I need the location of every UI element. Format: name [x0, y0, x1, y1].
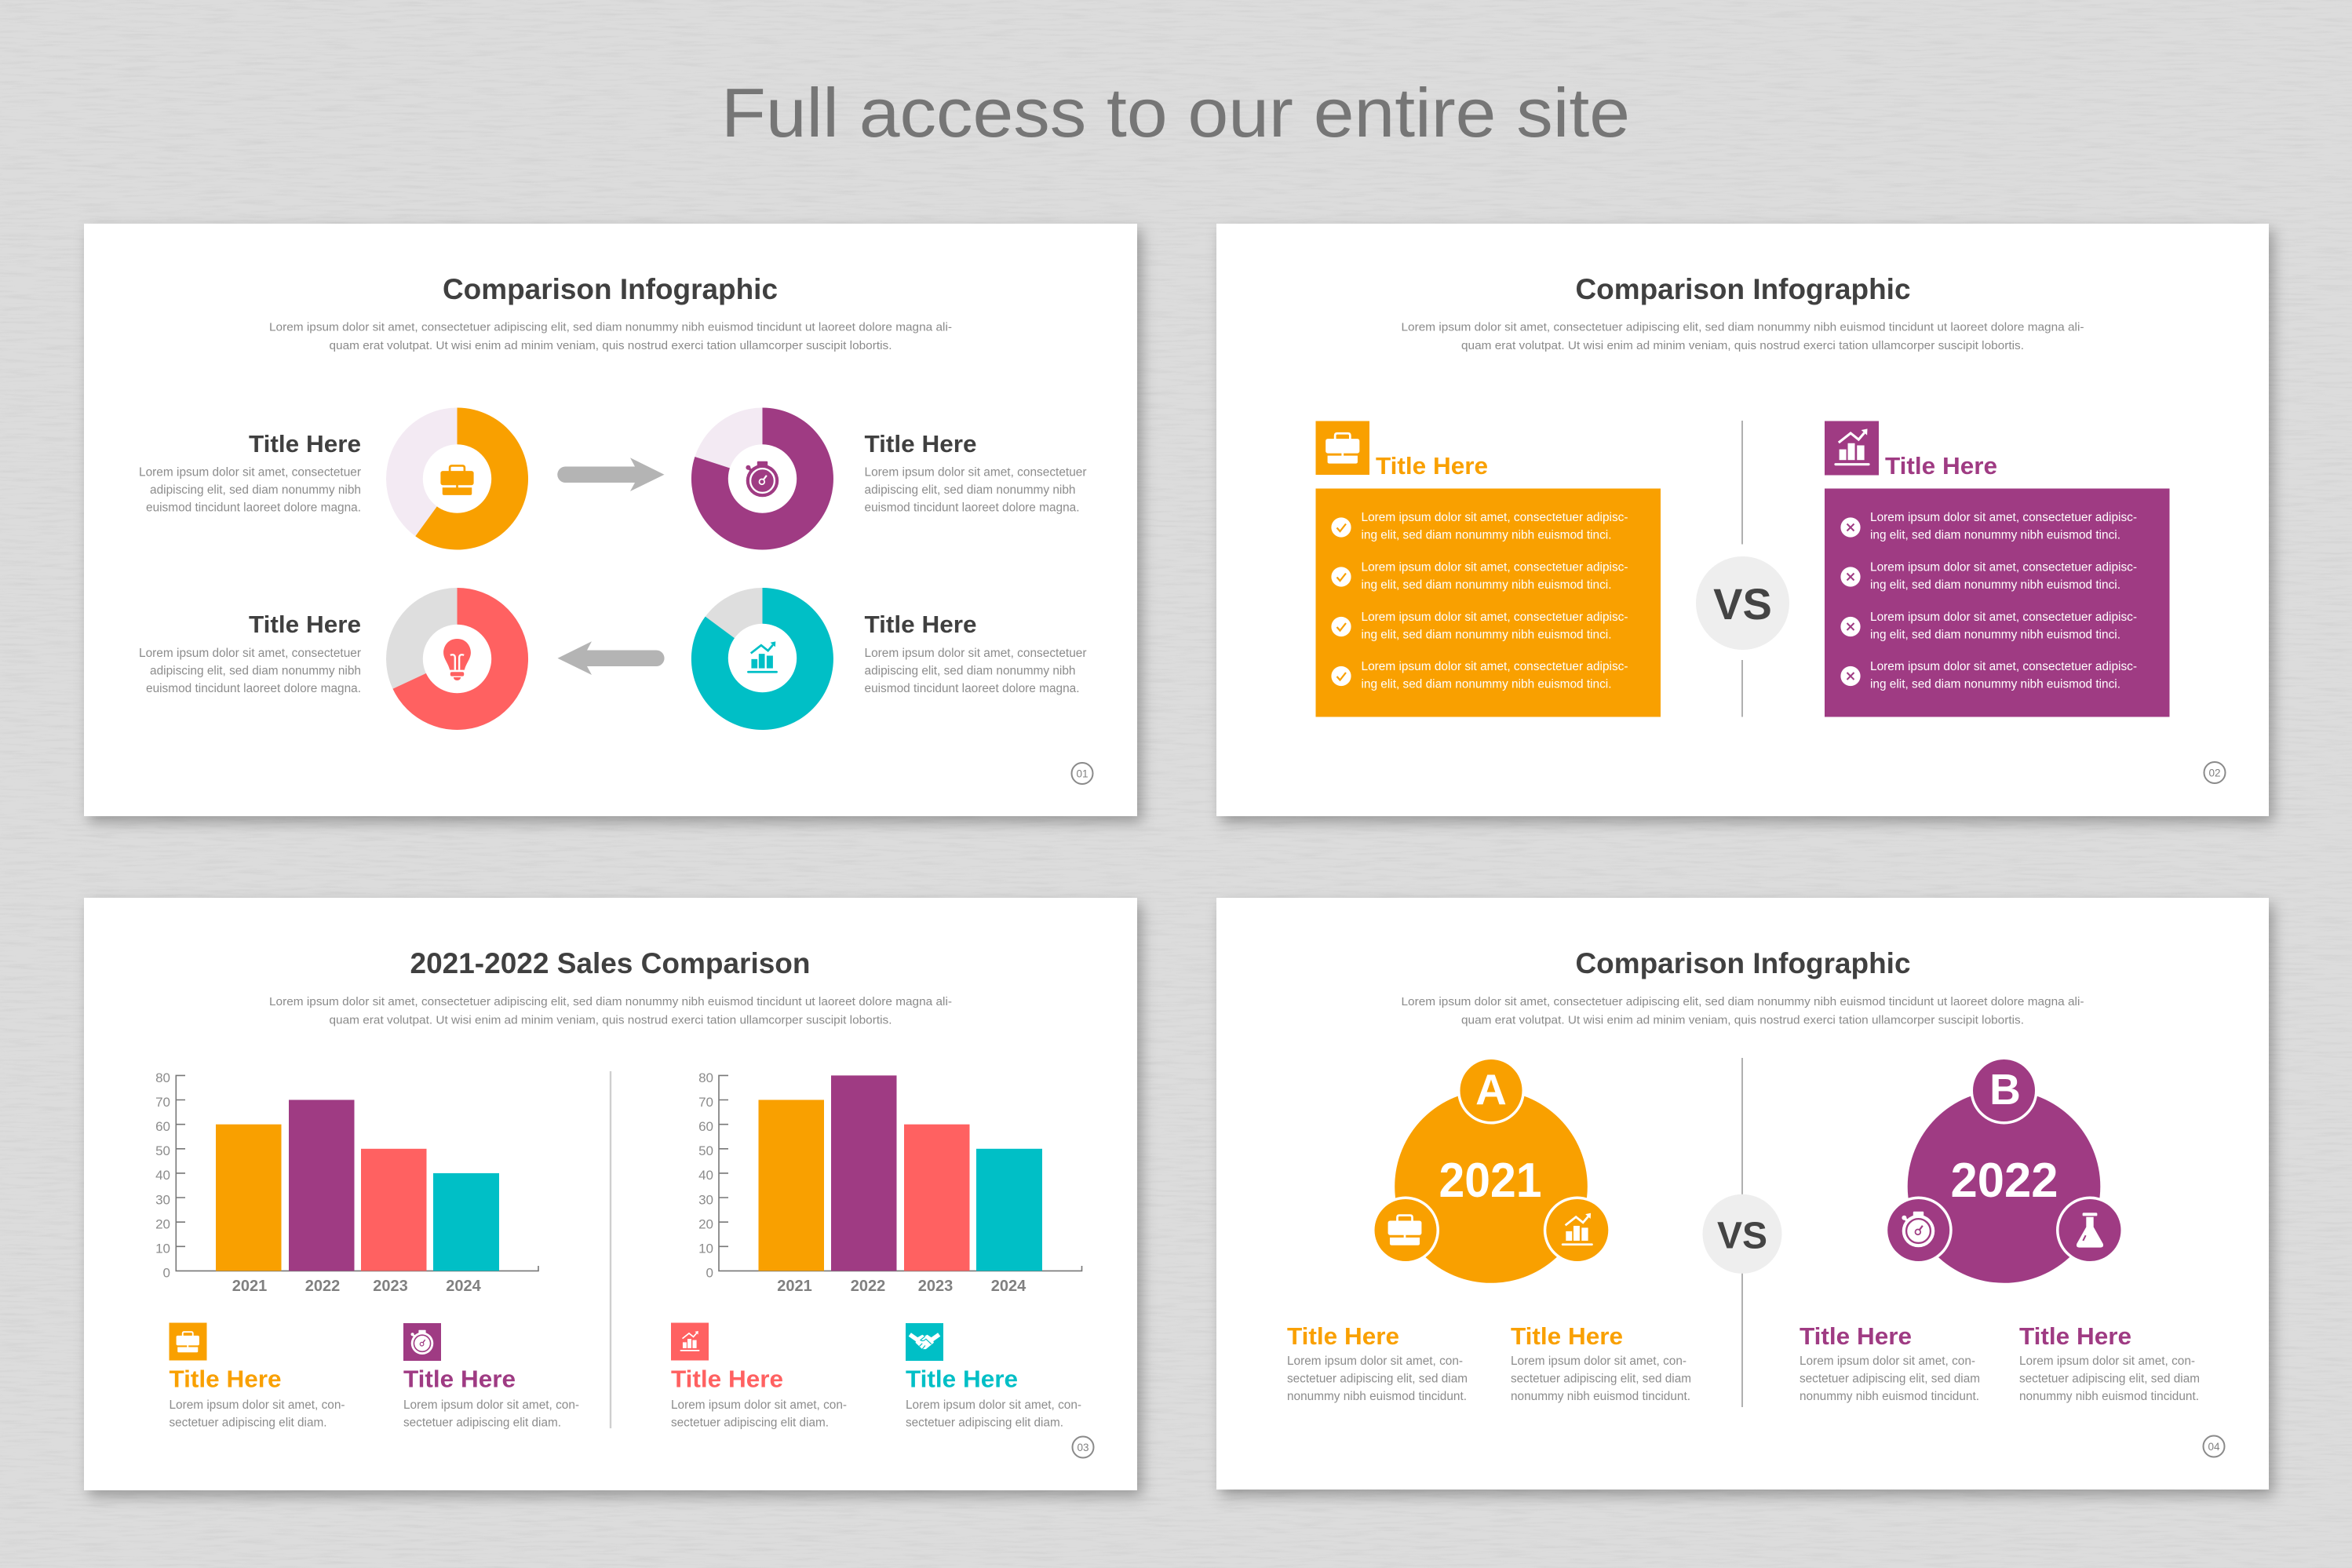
arrow: right [557, 458, 664, 491]
bar chart: left: 50 [155, 1143, 170, 1158]
panel 2 card [1216, 224, 2269, 816]
text block: orange one: Lorem ipsum dolor sit amet, con- [1287, 1355, 1463, 1368]
panel 1 intro text: Lorem ipsum dolor sit amet, consectetuer adipiscing elit, sed diam nonummy nibh euismod tincidunt ut laoreet dolore magna ali- [269, 320, 952, 334]
text block: purple one: nonummy nibh euismod tincidunt. [1800, 1390, 1979, 1403]
text block: top right: Lorem ipsum dolor sit amet, consectetuer [865, 466, 1086, 479]
list item 4: ing elit, sed diam nonummy nibh euismod tinci. [1870, 678, 2120, 691]
center divider and VS badge [1696, 421, 1789, 717]
bar chart: right: 60 [698, 1119, 713, 1134]
legend item: purple: Title Here [403, 1366, 516, 1392]
text block: bottom left: Title Here [249, 611, 361, 638]
panel 3 intro text [269, 995, 952, 1026]
donut: teal 85 percent [691, 588, 833, 730]
bar chart: right: 10 [698, 1242, 713, 1256]
panel 3 intro text: Lorem ipsum dolor sit amet, consectetuer adipiscing elit, sed diam nonummy nibh euismod tincidunt ut laoreet dolore magna ali- [269, 995, 952, 1008]
bar chart: right: 30 [698, 1193, 713, 1207]
right column header with icon: Title Here [1885, 452, 1997, 480]
panel 3 intro text: quam erat volutpat. Ut wisi enim ad minim veniam, quis nostrud exerci tation ullamcorper suscipit lobortis. [330, 1014, 892, 1026]
bar chart: left: 10 [155, 1242, 170, 1256]
purple 2022 circle cluster: 2022 [1951, 1154, 2058, 1208]
donut: purple 80 percent [691, 408, 833, 549]
panel 4 intro text: Lorem ipsum dolor sit amet, consectetuer adipiscing elit, sed diam nonummy nibh euismod tincidunt ut laoreet dolore magna ali- [1402, 995, 2084, 1008]
bar chart: left: 2022 [305, 1278, 340, 1295]
panel 2 intro text [1402, 320, 2084, 352]
panel 4 card [1216, 898, 2269, 1490]
bar chart: left: 60 [155, 1119, 170, 1134]
bar chart: left: 80 [155, 1070, 170, 1085]
badge growth chart [1544, 1196, 1611, 1264]
page number 02: 02 [2208, 768, 2221, 779]
panel 1 intro text [269, 320, 952, 352]
bar chart: left [155, 1070, 538, 1295]
text block: bottom left: Lorem ipsum dolor sit amet, consectetuer [139, 647, 361, 660]
text block: top right: adipiscing elit, sed diam nonummy nibh [865, 483, 1075, 497]
legend item: coral: Lorem ipsum dolor sit amet, con- [671, 1398, 847, 1412]
text block: orange two: sectetuer adipiscing elit, sed diam [1511, 1372, 1691, 1386]
bar chart: right [698, 1070, 1081, 1295]
bar chart: right: 0 [706, 1265, 713, 1281]
text block: bottom right: euismod tincidunt laoreet dolore magna. [865, 682, 1080, 695]
page number 03 [1072, 1436, 1094, 1458]
text block: purple two: Lorem ipsum dolor sit amet, con- [2019, 1355, 2195, 1368]
badge flask [2056, 1196, 2124, 1264]
page number 04: 04 [2208, 1441, 2220, 1453]
list item 4: Lorem ipsum dolor sit amet, consectetuer adipisc- [1870, 660, 2137, 673]
panel 1 card [84, 224, 1137, 816]
text block: bottom right: adipiscing elit, sed diam nonummy nibh [865, 664, 1075, 678]
bar chart: right: 2021 [777, 1278, 812, 1295]
bar chart: right: 80 [698, 1070, 713, 1085]
text block: orange one: Title Here [1287, 1322, 1399, 1350]
list item 1: Lorem ipsum dolor sit amet, consectetuer adipisc- [1361, 511, 1628, 524]
list item 3 [1840, 611, 2137, 642]
main title: Full access to our entire site [721, 74, 1630, 151]
panel 2: versus lists [1216, 224, 2269, 816]
bar chart: left: 70 [155, 1095, 170, 1110]
bar chart: left: 0 [163, 1265, 170, 1281]
page number 01: 01 [1076, 768, 1088, 780]
text block: bottom left [139, 611, 361, 695]
badge B: B [1989, 1065, 2021, 1114]
bar chart: right: 2024 [991, 1278, 1026, 1295]
bar chart: left: 20 [155, 1216, 170, 1232]
bar chart: left: 2024 [446, 1278, 482, 1295]
legend item: coral [671, 1323, 847, 1430]
legend item: teal [906, 1323, 1081, 1430]
text block: top left: Lorem ipsum dolor sit amet, consectetuer [139, 466, 361, 479]
bar chart: right: 2022 [851, 1278, 885, 1295]
legend item: coral: Title Here [671, 1366, 783, 1392]
orange 2021 circle cluster: 2021 [1439, 1154, 1541, 1208]
text block: top right: Title Here [865, 430, 976, 458]
panel 3: sales bar charts [84, 898, 1137, 1490]
text block: top right [865, 430, 1086, 515]
list item 1 [1331, 511, 1628, 542]
list item 2: ing elit, sed diam nonummy nibh euismod tinci. [1361, 578, 1612, 592]
text block: bottom left: euismod tincidunt laoreet dolore magna. [146, 682, 361, 695]
text block: top left: Title Here [249, 430, 361, 458]
text block: purple two [2019, 1322, 2200, 1403]
list item 3: Lorem ipsum dolor sit amet, consectetuer adipisc- [1870, 611, 2137, 624]
text block: purple two: nonummy nibh euismod tincidunt. [2019, 1390, 2199, 1403]
panel 4 intro text: quam erat volutpat. Ut wisi enim ad minim veniam, quis nostrud exerci tation ullamcorper suscipit lobortis. [1461, 1014, 2024, 1026]
list item 1: Lorem ipsum dolor sit amet, consectetuer adipisc- [1870, 511, 2137, 524]
bar chart: left: 30 [155, 1193, 170, 1207]
legend item: purple: Lorem ipsum dolor sit amet, con- [403, 1398, 579, 1412]
panel 2 heading: Comparison Infographic [1576, 273, 1910, 305]
list item 4 [1331, 660, 1628, 691]
arrow: left [557, 641, 665, 675]
panel 1 intro text: quam erat volutpat. Ut wisi enim ad minim veniam, quis nostrud exerci tation ullamcorper suscipit lobortis. [330, 339, 892, 352]
list item 2 [1331, 560, 1628, 592]
bar chart: right: 40 [698, 1168, 713, 1183]
page number 02 [2204, 762, 2226, 783]
page number 01 [1072, 763, 1092, 784]
list item 3: ing elit, sed diam nonummy nibh euismod tinci. [1361, 628, 1612, 642]
panel 4 heading: Comparison Infographic [1576, 947, 1910, 979]
panel 2 intro text: Lorem ipsum dolor sit amet, consectetuer adipiscing elit, sed diam nonummy nibh euismod tincidunt ut laoreet dolore magna ali- [1402, 320, 2084, 334]
center divider and VS badge: VS [1713, 579, 1772, 629]
bar chart: left: 2023 [373, 1278, 408, 1295]
text block: purple one: Lorem ipsum dolor sit amet, con- [1800, 1355, 1975, 1368]
text block: purple two: Title Here [2019, 1322, 2131, 1350]
divider and VS badge [1703, 1058, 1781, 1407]
legend item: teal: sectetuer adipiscing elit diam. [906, 1416, 1063, 1430]
text block: top left [139, 430, 361, 515]
page number 03: 03 [1077, 1442, 1089, 1453]
right purple list box [1825, 488, 2169, 717]
text block: orange two: nonummy nibh euismod tincidunt. [1511, 1390, 1690, 1403]
legend item: orange [170, 1323, 345, 1430]
bar chart: right: 50 [698, 1143, 713, 1158]
badge B [1970, 1056, 2037, 1124]
bar chart: right: 2023 [918, 1278, 953, 1295]
text block: bottom left: adipiscing elit, sed diam nonummy nibh [150, 664, 361, 678]
legend item: orange: Lorem ipsum dolor sit amet, con- [170, 1398, 345, 1412]
text block: orange one: sectetuer adipiscing elit, sed diam [1287, 1372, 1468, 1386]
list item 3: Lorem ipsum dolor sit amet, consectetuer adipisc- [1361, 611, 1628, 624]
list item 2: Lorem ipsum dolor sit amet, consectetuer adipisc- [1361, 560, 1628, 574]
list item 2: ing elit, sed diam nonummy nibh euismod tinci. [1870, 578, 2120, 592]
divider and VS badge: VS [1717, 1215, 1767, 1257]
text block: orange two: Lorem ipsum dolor sit amet, con- [1511, 1355, 1687, 1368]
panel 2 intro text: quam erat volutpat. Ut wisi enim ad minim veniam, quis nostrud exerci tation ullamcorper suscipit lobortis. [1461, 339, 2024, 352]
list item 1: ing elit, sed diam nonummy nibh euismod tinci. [1870, 529, 2120, 542]
purple 2022 circle cluster [1885, 1056, 2124, 1283]
text block: bottom right: Title Here [865, 611, 976, 638]
page number 04 [2204, 1436, 2224, 1457]
text block: purple one [1800, 1322, 1980, 1403]
text block: purple one: sectetuer adipiscing elit, sed diam [1800, 1372, 1980, 1386]
list item 2 [1840, 560, 2137, 592]
bar chart: left: 40 [155, 1168, 170, 1183]
legend item: purple [403, 1323, 579, 1430]
text block: top right: euismod tincidunt laoreet dolore magna. [865, 501, 1080, 515]
text block: orange two: Title Here [1511, 1322, 1623, 1350]
text block: top left: adipiscing elit, sed diam nonummy nibh [150, 483, 361, 497]
legend item: teal: Lorem ipsum dolor sit amet, con- [906, 1398, 1081, 1412]
badge A: A [1475, 1065, 1507, 1114]
badge briefcase [1372, 1196, 1439, 1264]
bar chart: right: 70 [698, 1095, 713, 1110]
panel 4: 2021 versus 2022 [1216, 898, 2269, 1490]
legend item: orange: sectetuer adipiscing elit diam. [170, 1416, 326, 1430]
list item 3 [1331, 611, 1628, 642]
list item 1: ing elit, sed diam nonummy nibh euismod tinci. [1361, 529, 1612, 542]
left column header with icon [1315, 421, 1488, 480]
text block: orange one: nonummy nibh euismod tincidunt. [1287, 1390, 1467, 1403]
panel 1: donut comparison [84, 224, 1137, 816]
text block: purple one: Title Here [1800, 1322, 1912, 1350]
text block: purple two: sectetuer adipiscing elit, sed diam [2019, 1372, 2200, 1386]
text block: bottom right: Lorem ipsum dolor sit amet, consectetuer [865, 647, 1086, 660]
panel 3 heading: 2021-2022 Sales Comparison [410, 947, 810, 979]
panel 1 heading: Comparison Infographic [443, 273, 778, 305]
bar chart: left: 2021 [232, 1278, 267, 1295]
list item 4: ing elit, sed diam nonummy nibh euismod tinci. [1361, 678, 1612, 691]
legend item: orange: Title Here [170, 1366, 281, 1392]
left column header with icon: Title Here [1376, 452, 1488, 480]
list item 2: Lorem ipsum dolor sit amet, consectetuer adipisc- [1870, 560, 2137, 574]
list item 4: Lorem ipsum dolor sit amet, consectetuer adipisc- [1361, 660, 1628, 673]
legend item: purple: sectetuer adipiscing elit diam. [403, 1416, 561, 1430]
right column header with icon [1825, 421, 1997, 480]
list item 3: ing elit, sed diam nonummy nibh euismod tinci. [1870, 628, 2120, 642]
text block: orange two [1511, 1322, 1691, 1403]
badge stopwatch [1885, 1196, 1953, 1264]
legend item: coral: sectetuer adipiscing elit diam. [671, 1416, 829, 1430]
badge A [1457, 1056, 1525, 1124]
text block: top left: euismod tincidunt laoreet dolore magna. [146, 501, 361, 515]
bar chart: right: 20 [698, 1216, 713, 1232]
left orange list box [1315, 488, 1661, 717]
donut: orange 60 percent [386, 407, 528, 549]
panel 3 card [84, 898, 1137, 1490]
text block: orange one [1287, 1322, 1468, 1403]
legend item: teal: Title Here [906, 1366, 1018, 1392]
list item 1 [1840, 511, 2137, 542]
vertical divider [610, 1071, 611, 1428]
orange 2021 circle cluster [1372, 1056, 1611, 1283]
list item 4 [1840, 660, 2137, 691]
donut: coral 68 percent [386, 588, 528, 730]
text block: bottom right [865, 611, 1086, 695]
panel 4 intro text [1402, 995, 2084, 1026]
